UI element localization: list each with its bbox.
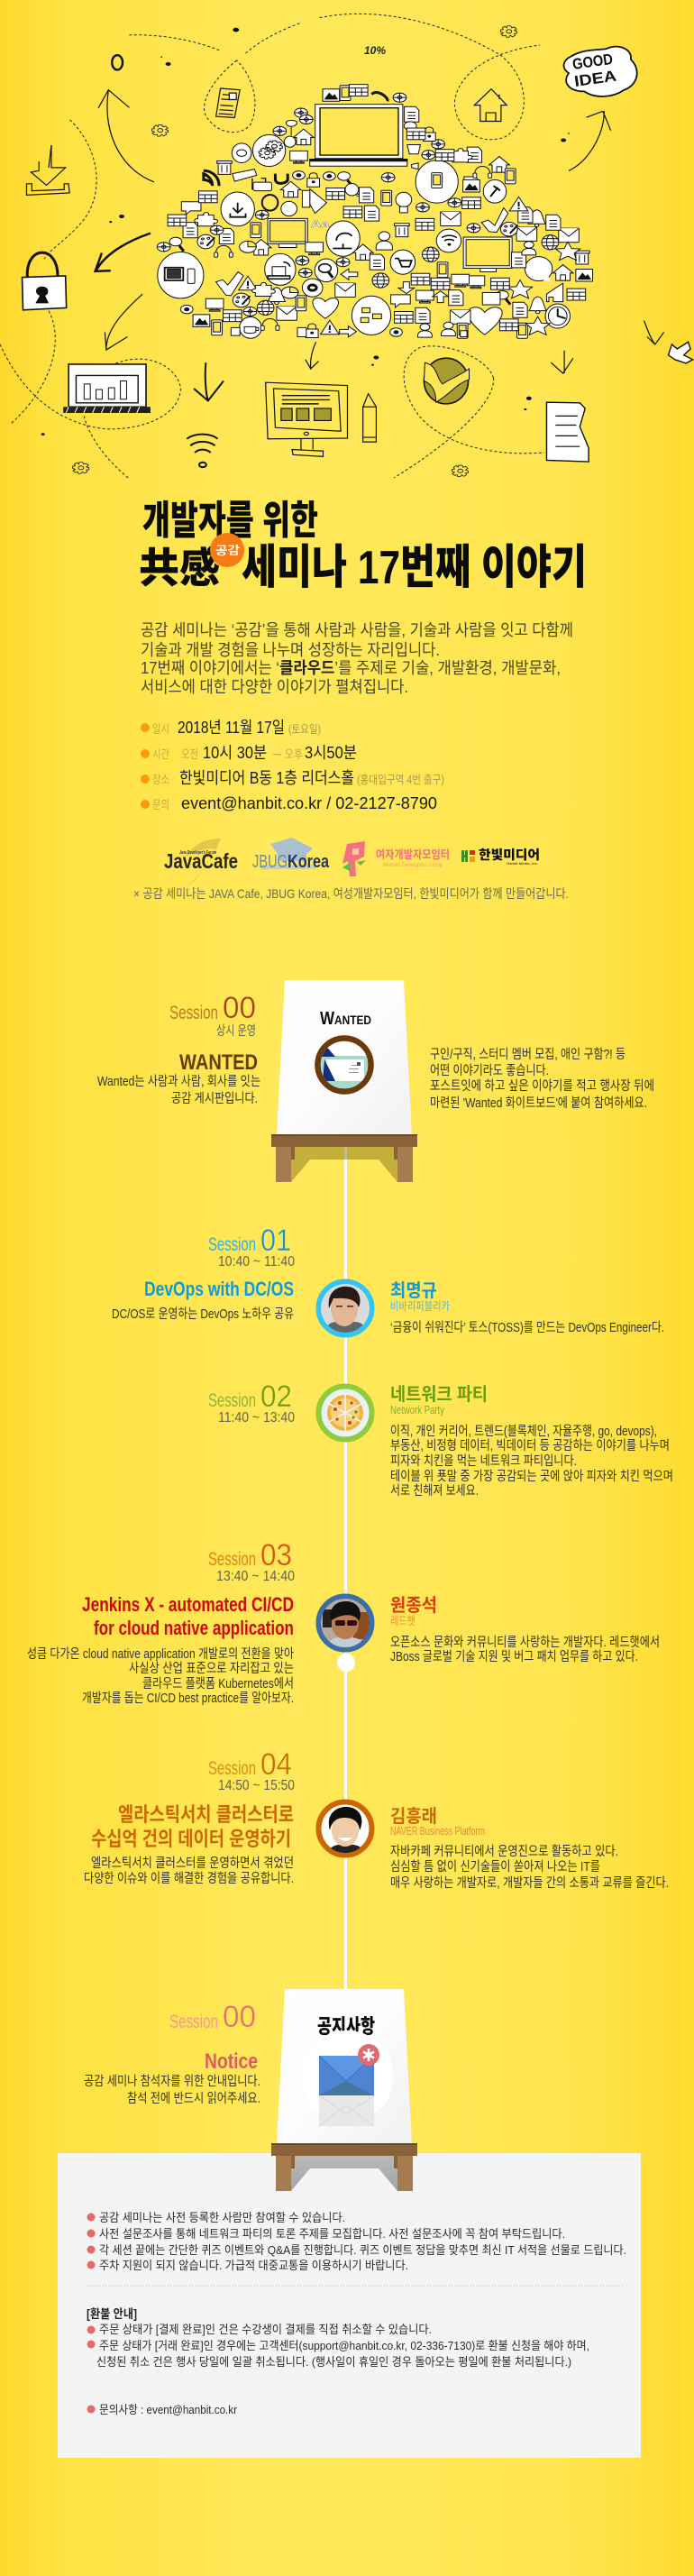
speaker company: 레드햇 — [390, 1614, 415, 1627]
wanted right text: 마련된 'Wanted 화이트보드'에 붙여 참여하세요. — [430, 1095, 647, 1111]
session 03 — [27, 1538, 660, 1706]
brush calligraphy: 共感 — [139, 545, 220, 591]
session time: 14:50 ~ 15:50 — [218, 1778, 295, 1793]
intro paragraph: 17번째 이야기에서는 ‘클라우드’를 주제로 기술, 개발환경, 개발문화, — [141, 659, 561, 677]
session description: 참석 전에 반드시 읽어주세요. — [127, 2091, 260, 2106]
session number: Session — [208, 1234, 256, 1255]
monitor icons — [268, 218, 512, 272]
doodle: desktop monitor — [266, 382, 347, 456]
session number: 00 — [223, 991, 256, 1025]
hero illustration: cloud of icons with doodles — [0, 14, 693, 478]
doodle label: good idea: GOOD — [571, 50, 614, 73]
easel stand — [271, 1134, 417, 1182]
intro paragraph: 서비스에 대한 다양한 이야기가 펼쳐집니다. — [141, 678, 408, 696]
logo: women developers group — [342, 841, 450, 876]
time: ~ — [272, 748, 282, 761]
doodle label: percent: 10% — [364, 44, 386, 57]
session description: 클라우드 플랫폼 Kubernetes에서 — [142, 1676, 294, 1691]
refund bullets — [87, 2323, 589, 2369]
session title: Notice — [205, 2049, 258, 2074]
session 00: wanted — [97, 991, 260, 1106]
doodle: note in dashed drop — [216, 88, 240, 117]
session number: 00 — [223, 2000, 256, 2034]
notice easel board — [271, 1989, 417, 2191]
session number: 03 — [260, 1538, 292, 1572]
main laptop — [310, 105, 407, 166]
session number: 04 — [260, 1747, 292, 1782]
intro paragraph: 기술과 개발 경험을 나누며 성장하는 자리입니다. — [141, 641, 440, 659]
session number — [169, 991, 256, 1025]
refund bullets: 주문 상태가 [거래 완료]인 경우에는 고객센터(support@hanbit.co.kr, 02-336-7130)로 환불 신청을 해야 하며, — [99, 2339, 589, 2352]
board — [277, 980, 412, 1134]
doodle: paper document — [546, 402, 589, 462]
refund bullets: 신청된 취소 건은 행사 당일에 일괄 취소됩니다. (행사일이 휴일인 경우 돌아오는 평일에 환불 처리됩니다.) — [96, 2355, 571, 2369]
notice bullets — [87, 2211, 626, 2272]
logo: hanbit media: 한빛미디어 — [479, 848, 540, 862]
speaker portrait — [319, 1801, 371, 1857]
contact line: 문의사항 : event@hanbit.co.kr — [99, 2403, 238, 2416]
wanted right text: 포스트잇에 하고 싶은 이야기를 적고 행사장 뒤에 — [430, 1078, 654, 1094]
session 01 — [112, 1224, 664, 1335]
speaker name: 원종석 — [390, 1595, 437, 1616]
session description — [84, 1856, 294, 1886]
title line two: 세미나 17번째 이야기 — [242, 542, 587, 594]
place: 한빛미디어 B동 1층 리더스홀 — [179, 769, 354, 787]
speaker bio: 심심할 틈 없이 신기술들이 쏟아져 나오는 IT를 — [390, 1859, 600, 1875]
doodle: pencil — [363, 394, 376, 442]
partner logos — [164, 838, 540, 888]
session number: 02 — [260, 1380, 292, 1414]
doodle: wifi — [187, 435, 218, 467]
notice bullets: 사전 설문조사를 통해 네트워크 파티의 토론 주제를 모집합니다. 사전 설문조사에 꼭 참여 부탁드립니다. — [99, 2227, 565, 2241]
session description: DC/OS로 운영하는 DevOps 노하우 공유 — [112, 1306, 294, 1322]
doodle: padlock — [23, 252, 67, 310]
session number: Session — [208, 1758, 256, 1779]
speaker bio — [390, 1844, 669, 1891]
intro paragraph: 공감 세미나는 ‘공감’을 통해 사람과 사람을, 기술과 사람을 잇고 다함께 — [141, 621, 573, 639]
icon cloud — [157, 85, 593, 338]
intro paragraph — [141, 621, 573, 696]
time: 10시 30분 — [203, 744, 267, 762]
contact: event@hanbit.co.kr / 02-2127-8790 — [181, 794, 437, 812]
time — [141, 744, 357, 762]
wanted easel board — [271, 980, 417, 1182]
logo: JavaCafe: Java Developer's Forum — [179, 850, 216, 856]
mail icon — [301, 2031, 393, 2126]
board heading: WANTED — [320, 1009, 371, 1029]
speaker bio: JBoss 글로벌 기술 지원 및 버그 패치 업무를 하고 있다. — [390, 1649, 638, 1664]
orange badge: 공감 — [215, 544, 240, 557]
session description: Wanted는 사람과 사람, 회사를 잇는 — [97, 1074, 260, 1089]
session number — [208, 1380, 292, 1414]
session description — [27, 1646, 294, 1706]
session description — [84, 2074, 260, 2106]
time: 오후 — [285, 747, 303, 761]
refund heading: [환불 안내] — [87, 2307, 137, 2321]
notice bullets: 공감 세미나는 사전 등록한 사람만 참여할 수 있습니다. — [99, 2211, 345, 2224]
date: (토요일) — [288, 723, 321, 736]
logo: JBUG Korea: Korea — [288, 852, 330, 872]
place — [141, 769, 444, 787]
notice bullets: 주차 지원이 되지 않습니다. 가급적 대중교통을 이용하시기 바랍니다. — [99, 2259, 408, 2272]
wanted image — [317, 1039, 371, 1091]
session number: Session — [208, 1549, 256, 1570]
doodle: chart laptop — [63, 364, 151, 413]
board — [277, 1989, 412, 2143]
session description: 성큼 다가온 cloud native application 개발로의 전환을 맞아 — [27, 1646, 294, 1662]
session time: 11:40 ~ 13:40 — [218, 1410, 295, 1426]
logo: JavaCafe: JavaCafe — [164, 849, 238, 873]
time: 3시50분 — [305, 744, 357, 762]
timeline node — [337, 1654, 355, 1672]
session title — [82, 1593, 294, 1639]
session title: Jenkins X - automated CI/CD — [82, 1593, 294, 1616]
session time: 상시 운영 — [216, 1023, 256, 1039]
doodle: hatched globe — [424, 358, 470, 404]
doodle label: good idea: IDEA — [573, 68, 617, 90]
session description: 공감 세미나 참석자를 위한 안내입니다. — [84, 2074, 260, 2089]
event details — [141, 719, 444, 812]
small icons — [157, 85, 593, 338]
session number — [208, 1224, 291, 1258]
logo: women developers group: Women Developers Group — [383, 863, 443, 868]
contact: 문의 — [152, 798, 169, 811]
notice text — [87, 2211, 626, 2416]
session number: Session — [169, 2012, 218, 2032]
logo: hanbit media — [461, 848, 540, 866]
session title — [91, 1803, 294, 1850]
speaker portrait — [319, 1282, 371, 1334]
doodle: good idea bubble — [564, 47, 637, 96]
notice info panel — [58, 2153, 641, 2458]
session 04 — [84, 1747, 669, 1891]
session description — [97, 1074, 260, 1106]
session description: 공감 게시판입니다. — [171, 1091, 258, 1106]
orange badge — [210, 533, 244, 567]
session title: 엘라스틱서치 클러스터로 — [118, 1803, 294, 1826]
session description: 엘라스틱서치 클러스터를 운영하면서 겪었던 — [91, 1856, 294, 1871]
session number: Session — [208, 1390, 256, 1411]
logo: hanbit media: Hanbit Media, Inc. — [507, 862, 538, 866]
session 02 — [208, 1380, 673, 1499]
dashed orbit lines — [0, 14, 544, 478]
pizza icon — [319, 1387, 371, 1439]
small icons: Aa — [311, 218, 330, 229]
date: 일시 — [152, 722, 169, 736]
session title: WANTED — [179, 1050, 258, 1075]
doodle label: good idea — [571, 50, 617, 90]
session title: 수십억 건의 데이터 운영하기 — [91, 1828, 291, 1850]
session number: Session — [169, 1003, 218, 1023]
easel stand — [271, 2143, 417, 2191]
session number — [208, 1538, 292, 1572]
session number — [169, 2000, 256, 2034]
wanted right text: 구인/구직, 스터디 멤버 모집, 애인 구함?! 등 — [430, 1047, 626, 1062]
logo: JBUG Korea: JBUG — [252, 852, 288, 872]
large round badges — [158, 134, 570, 338]
place: 장소 — [152, 773, 169, 786]
hand-drawn arrows — [96, 90, 664, 400]
speaker bio — [390, 1635, 660, 1664]
speaker name: 최명규 — [390, 1280, 437, 1301]
session number: 01 — [260, 1224, 291, 1258]
session description: 사실상 산업 표준으로 자리잡고 있는 — [129, 1661, 294, 1676]
hearts and checkmarks — [216, 208, 508, 335]
timeline line — [344, 1147, 347, 1989]
party description: 피자와 치킨을 먹는 네트워크 파티입니다. — [390, 1453, 577, 1469]
logo: JBUG Korea — [252, 838, 330, 872]
notice bullets: 각 세션 끝에는 간단한 퀴즈 이벤트와 Q&A를 진행합니다. 퀴즈 이벤트 정답을 맞추면 최신 IT 서적을 선물로 드립니다. — [99, 2243, 626, 2257]
speaker company: 비바리퍼블리카 — [390, 1300, 450, 1313]
small doodle marks — [41, 26, 693, 477]
logo: women developers group: 여자개발자모임터 — [376, 848, 450, 861]
session description: 다양한 이슈와 이를 해결한 경험을 공유합니다. — [84, 1871, 294, 1886]
refund bullets: 주문 상태가 [결제 완료]인 건은 수강생이 결제를 직접 취소할 수 있습니다. — [99, 2323, 432, 2336]
title line one: 개발자를 위한 — [142, 499, 318, 543]
easel shadow — [291, 1147, 397, 1182]
board heading: 공지사항 — [317, 2015, 375, 2038]
session 00: notice — [84, 2000, 260, 2106]
wanted right text: 어떤 이야기라도 좋습니다. — [430, 1063, 549, 1078]
session time: 13:40 ~ 14:40 — [216, 1569, 295, 1584]
time: 오전 — [181, 747, 198, 761]
title — [139, 499, 587, 594]
speaker bio: 자바카페 커뮤니티에서 운영진으로 활동하고 있다. — [390, 1844, 618, 1859]
session title: for cloud native application — [94, 1617, 294, 1639]
speaker portrait — [319, 1596, 371, 1650]
speaker name: 김흥래 — [390, 1806, 437, 1827]
party subtitle: Network Party — [390, 1404, 445, 1416]
doodle: download tray — [26, 145, 69, 195]
speaker company: NAVER Business Platform — [390, 1825, 485, 1838]
session title: DevOps with DC/OS — [144, 1278, 294, 1300]
date — [141, 719, 321, 737]
session description: 개발자를 돕는 CI/CD best practice를 알아보자. — [82, 1691, 294, 1706]
partner note: × 공감 세미나는 JAVA Cafe, JBUG Korea, 여성개발자모임터, 한빛미디어가 함께 만들어갑니다. — [133, 886, 569, 901]
session time: 10:40 ~ 11:40 — [218, 1254, 295, 1270]
party title: 네트워크 파티 — [390, 1384, 488, 1405]
time: 시간 — [152, 747, 169, 761]
party description: 서로 친해져 보세요. — [390, 1483, 479, 1499]
logo: JavaCafe — [164, 839, 238, 888]
party description — [390, 1424, 673, 1499]
date: 2018년 11월 17일 — [178, 719, 285, 737]
easel shadow — [291, 2156, 397, 2191]
place: (홍대입구역 4번 출구) — [357, 774, 444, 786]
doodle: house in dashed drop — [474, 89, 507, 122]
wanted right text — [430, 1047, 654, 1111]
session number — [208, 1747, 292, 1782]
